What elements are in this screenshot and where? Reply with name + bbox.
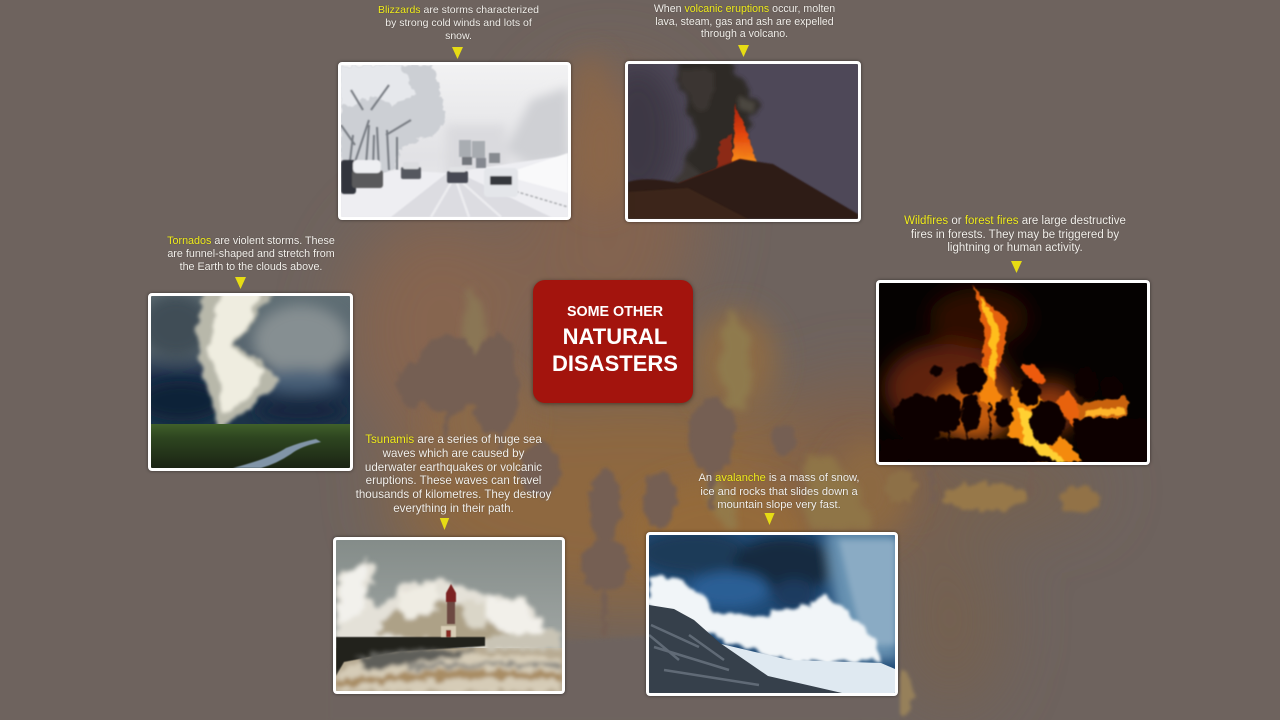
orange patches right of the forest (884, 471, 1100, 719)
panel: wildfires (874, 214, 1152, 467)
title: large line (552, 324, 678, 376)
text: wildfires description (904, 214, 1126, 254)
arrow: blizzards (452, 47, 463, 59)
photo: blizzard road scene (338, 62, 571, 220)
text: volcanic eruptions description (654, 3, 835, 40)
text: wildfires description: lightning or human activity. (947, 242, 1083, 254)
text: avalanche description: ice and rocks that slides down a (700, 486, 858, 498)
text: blizzards description: Blizzards are storms characterized (378, 4, 539, 16)
text: tornados description: are funnel-shaped and stretch from (167, 248, 335, 260)
text: tsunamis description (356, 433, 552, 515)
arrow: wildfires (1011, 261, 1022, 273)
ground edge (330, 636, 900, 720)
text: tsunamis description: everything in their path. (393, 502, 514, 515)
photo: tornado over field (148, 293, 353, 471)
panel: blizzards (336, 4, 573, 222)
text: blizzards description: snow. (445, 30, 472, 42)
text: wildfires description: fires in forests. They may be triggered by (911, 229, 1119, 241)
text: wildfires description: Wildfires or forest fires are large destructive (904, 215, 1126, 227)
panel: volcanic eruptions (623, 3, 862, 224)
arrow: tsunamis (440, 518, 450, 530)
panel: tsunamis (332, 433, 567, 696)
photo: avalanche on mountain (646, 532, 898, 696)
photo: volcano erupting (625, 61, 861, 222)
text: tornados description: Tornados are violent storms. These (167, 235, 335, 247)
photo: forest fire at night (876, 280, 1150, 465)
title: small line: SOME OTHER (567, 304, 663, 320)
text: tsunamis description: eruptions. These waves can travel (366, 474, 541, 487)
left snowy trees (341, 65, 446, 180)
panel: tornados (146, 235, 355, 472)
text: tsunamis description: thousands of kilometres. They destroy (356, 488, 551, 501)
text: tornados description (167, 235, 335, 273)
text: tsunamis description: Tsunamis are a series of huge sea (365, 433, 542, 446)
text: volcanic eruptions description: When volcanic eruptions occur, molten (654, 3, 835, 15)
title: large line: DISASTERS (552, 351, 678, 376)
arrow: tornados (235, 277, 246, 289)
text: avalanche description: mountain slope very fast. (717, 499, 841, 511)
text: tsunamis description: waves which are caused by (383, 447, 524, 460)
text: blizzards description: by strong cold winds and lots of (385, 17, 532, 29)
text: tsunamis description: uderwater earthquakes or volcanic (365, 461, 542, 474)
text: avalanche description: An avalanche is a mass of snow, (699, 472, 859, 484)
text: blizzards description (378, 4, 539, 42)
title: large line: NATURAL (563, 324, 667, 349)
tree silhouettes (398, 335, 1032, 638)
title box (533, 280, 693, 403)
text: volcanic eruptions description: lava, steam, gas and ash are expelled (655, 16, 834, 28)
text: tornados description: the Earth to the clouds above. (180, 261, 322, 273)
text: avalanche description (698, 472, 859, 511)
flames (463, 280, 870, 530)
panel: avalanches (644, 472, 900, 698)
arrow: volcanic eruptions (738, 45, 749, 57)
photo: tsunami wave at lighthouse (333, 537, 565, 694)
text: volcanic eruptions description: through a volcano. (701, 28, 788, 40)
arrow: avalanche (764, 513, 774, 525)
